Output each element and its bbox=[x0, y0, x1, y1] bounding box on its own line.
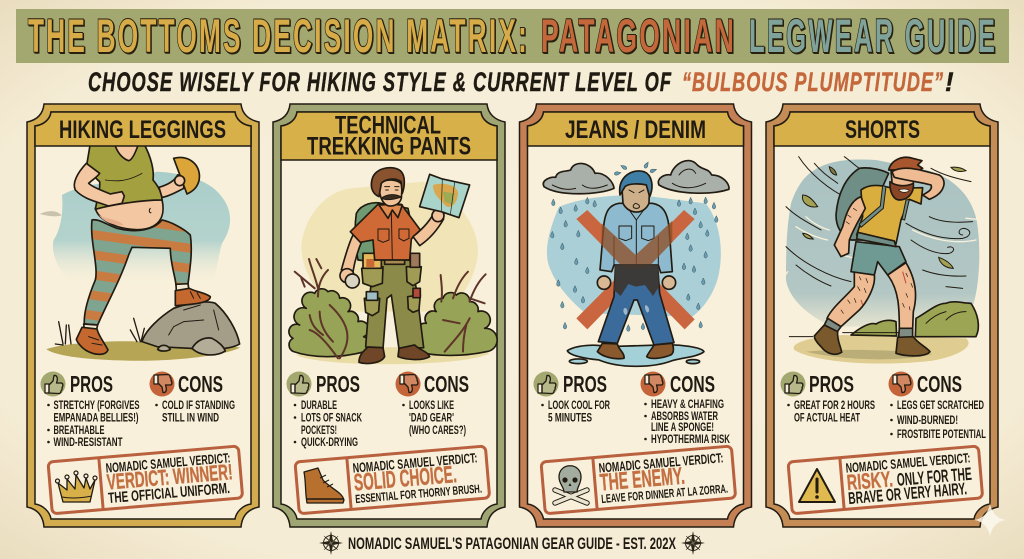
icon: compass left bbox=[319, 531, 343, 555]
cons list: HYPOTHERMIA RISK bbox=[651, 432, 730, 446]
pros heading: PROS bbox=[70, 371, 113, 397]
title banner: THE BOTTOMS DECISION MATRIX: bbox=[28, 9, 529, 62]
pros heading bbox=[40, 371, 113, 397]
illustration: woman in striped leggings holding an empanada bbox=[40, 143, 240, 361]
verdict stamp: the enemy bbox=[541, 446, 736, 514]
pros list: 5 MINUTES bbox=[548, 410, 592, 424]
cons heading: CONS bbox=[424, 371, 469, 397]
cons heading bbox=[396, 371, 469, 397]
footer credit: NOMADIC SAMUEL'S PATAGONIAN GEAR GUIDE - EST. 202X bbox=[348, 534, 676, 553]
pros heading: PROS bbox=[809, 371, 854, 397]
pros list: BREATHABLE bbox=[54, 423, 104, 437]
cons list: LINE A SPONGE! bbox=[651, 420, 714, 434]
panel: hiking leggings bbox=[27, 104, 259, 527]
pros list: GREAT FOR 2 HOURS bbox=[794, 398, 875, 412]
illustration: soaked man in jeans under rain clouds with a red X bbox=[543, 161, 729, 366]
pros list: OF ACTUAL HEAT bbox=[794, 410, 860, 424]
pros heading bbox=[286, 371, 360, 397]
cons list bbox=[155, 398, 235, 424]
pros heading bbox=[780, 371, 854, 397]
header: shorts bbox=[774, 112, 990, 146]
illustration: man with map, cargo pants and thorny bushes bbox=[289, 168, 497, 364]
cons list: STILL IN WIND bbox=[162, 410, 219, 424]
panel: technical trekking pants bbox=[273, 104, 505, 527]
cons heading: CONS bbox=[670, 371, 715, 397]
pros list: LOOK COOL FOR bbox=[548, 398, 610, 412]
cons list: WIND-BURNED! bbox=[897, 413, 958, 427]
illustration: windblown hiker in shorts bbox=[784, 157, 984, 364]
header: jeans / denim: JEANS / DENIM bbox=[565, 116, 706, 144]
pros list bbox=[47, 398, 140, 449]
verdict stamp: winner bbox=[48, 446, 243, 514]
verdict stamp: the enemy: LEAVE FOR DINNER AT LA ZORRA. bbox=[601, 481, 728, 506]
pros list bbox=[541, 398, 610, 424]
cons heading bbox=[888, 371, 962, 397]
verdict stamp: solid choice: ESSENTIAL FOR THORNY BRUSH. bbox=[355, 481, 482, 506]
icon: crown bbox=[56, 471, 97, 502]
pros heading: PROS bbox=[316, 371, 360, 397]
pros list: DURABLE bbox=[301, 398, 337, 412]
icon: hiking boot bbox=[304, 468, 344, 503]
pros list: STRETCHY (FORGIVES bbox=[54, 398, 140, 412]
header: hiking leggings bbox=[35, 112, 251, 146]
verdict stamp: winner: THE OFFICIAL UNIFORM. bbox=[108, 480, 231, 507]
pros heading: PROS bbox=[563, 371, 607, 397]
cons list: COLD IF STANDING bbox=[162, 398, 235, 412]
cons heading: CONS bbox=[178, 371, 223, 397]
cons list: HEAVY & CHAFING bbox=[651, 397, 724, 411]
icon: skull and crossbones bbox=[555, 466, 587, 503]
verdict stamp: the enemy: NOMADIC SAMUEL VERDICT: bbox=[598, 450, 724, 476]
cons list: 'DAD GEAR' bbox=[409, 410, 454, 424]
verdict stamp: risky bbox=[788, 446, 983, 514]
pros list: POCKETS! bbox=[301, 423, 337, 437]
verdict stamp: winner: NOMADIC SAMUEL VERDICT: bbox=[105, 450, 231, 476]
pros heading bbox=[534, 371, 607, 397]
icon: warning triangle bbox=[799, 469, 835, 502]
verdict stamp: winner: VERDICT: WINNER! bbox=[106, 459, 233, 495]
pros list: EMPANADA BELLIES!) bbox=[54, 410, 138, 424]
subtitle: CHOOSE WISELY FOR HIKING STYLE & CURRENT LEVEL OF bbox=[88, 67, 672, 97]
pros list: LOTS OF SNACK bbox=[301, 410, 362, 424]
header: shorts: SHORTS bbox=[845, 116, 920, 144]
cons list bbox=[644, 397, 730, 446]
footer credit bbox=[319, 531, 705, 555]
panel: shorts bbox=[766, 104, 998, 527]
cons heading: CONS bbox=[917, 371, 962, 397]
verdict stamp: the enemy: THE ENEMY. bbox=[599, 463, 686, 497]
pros list bbox=[787, 398, 875, 424]
cons list bbox=[890, 398, 986, 441]
verdict stamp: solid choice bbox=[295, 446, 490, 514]
cons heading bbox=[150, 371, 223, 397]
pros list: WIND-RESISTANT bbox=[54, 435, 123, 449]
cons list: (WHO CARES?) bbox=[409, 423, 466, 437]
title banner: PATAGONIAN bbox=[541, 9, 736, 62]
header: hiking leggings: HIKING LEGGINGS bbox=[59, 116, 226, 144]
cons list: ABSORBS WATER bbox=[651, 409, 718, 423]
cons heading bbox=[640, 371, 715, 397]
cons list: LOOKS LIKE bbox=[409, 398, 454, 412]
header: technical trekking pants: TECHNICAL bbox=[335, 112, 441, 140]
pros list bbox=[294, 398, 362, 449]
header: technical trekking pants bbox=[281, 112, 497, 160]
verdict stamp: solid choice: NOMADIC SAMUEL VERDICT: bbox=[352, 450, 478, 476]
header: technical trekking pants: TREKKING PANTS bbox=[307, 132, 471, 160]
cons list bbox=[402, 398, 466, 437]
header: jeans / denim bbox=[528, 112, 744, 146]
watermark sparkle bbox=[974, 503, 1006, 537]
pros list: QUICK-DRYING bbox=[301, 435, 358, 449]
verdict stamp: risky: RISKY. bbox=[846, 466, 894, 495]
panel: jeans / denim bbox=[520, 104, 752, 527]
icon: compass right bbox=[681, 531, 705, 555]
subtitle: ! bbox=[945, 67, 955, 97]
verdict stamp: solid choice: SOLID CHOICE. bbox=[353, 461, 458, 497]
